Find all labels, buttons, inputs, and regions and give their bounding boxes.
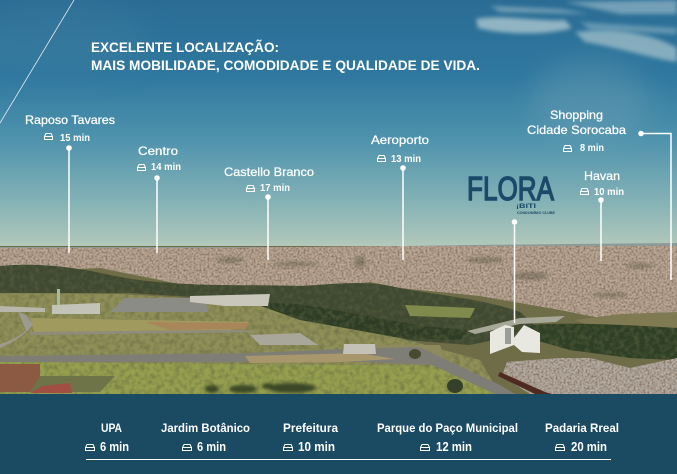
marker: Raposo Tavares: 15 min (60, 133, 90, 144)
item: Padaria Rreal: 20 min (571, 440, 607, 454)
title (91, 38, 480, 73)
marker: Raposo Tavares: Raposo Tavares (25, 113, 115, 127)
decorative diagonal line (0, 0, 74, 123)
marker: Raposo Tavares (25, 113, 115, 253)
title: EXCELENTE LOCALIZAÇÃO: (91, 38, 279, 55)
item: Padaria Rreal (545, 421, 619, 454)
item: UPA: UPA (101, 421, 122, 435)
title: MAIS MOBILIDADE, COMODIDADE E QUALIDADE DE VIDA. (91, 57, 480, 73)
aerial photo: city and terrain (0, 243, 677, 394)
marker: Centro: 14 min (151, 162, 181, 173)
item: Prefeitura (283, 421, 338, 454)
marker: Castello Branco: 17 min (260, 183, 290, 194)
background: sky (0, 0, 677, 255)
item: Parque do Paço Municipal: 12 min (436, 440, 472, 454)
logo: Flora Ibiti (467, 170, 555, 215)
item: Jardim Botânico: Jardim Botânico (161, 421, 250, 435)
logo: Flora Ibiti: ¡BITI (516, 203, 536, 210)
item: Parque do Paço Municipal: Parque do Paço Municipal (377, 421, 518, 435)
marker: Castello Branco: Castello Branco (224, 165, 314, 179)
marker: Shopping Cidade Sorocaba (527, 108, 671, 280)
panel: nearby places (0, 394, 677, 474)
marker: Havan: 10 min (594, 187, 624, 198)
marker: Flora location (512, 219, 517, 323)
marker: Aeroporto: Aeroporto (371, 133, 429, 147)
marker: Havan: Havan (584, 169, 620, 183)
marker: Aeroporto: 13 min (391, 154, 421, 165)
marker: Havan (580, 169, 624, 261)
marker: Shopping Cidade Sorocaba: 8 min (580, 143, 604, 154)
marker: Castello Branco (224, 165, 314, 260)
marker: Shopping Cidade Sorocaba: Shopping (550, 108, 603, 122)
item: Prefeitura: Prefeitura (283, 421, 338, 435)
item: Padaria Rreal: Padaria Rreal (545, 421, 619, 435)
item: Jardim Botânico (161, 421, 250, 454)
item: UPA: 6 min (100, 440, 129, 454)
marker: Centro (138, 144, 181, 253)
item: Jardim Botânico: 6 min (197, 440, 226, 454)
logo: Flora Ibiti: FLORA (467, 170, 554, 207)
marker: Centro: Centro (138, 144, 178, 158)
item: UPA (86, 421, 129, 454)
item: Parque do Paço Municipal (377, 421, 518, 454)
marker: Aeroporto (371, 133, 429, 260)
logo: Flora Ibiti: CONDOMÍNIO CLUBE (517, 210, 555, 215)
marker: Shopping Cidade Sorocaba: Cidade Sorocaba (527, 123, 626, 137)
item: Prefeitura: 10 min (298, 440, 335, 454)
